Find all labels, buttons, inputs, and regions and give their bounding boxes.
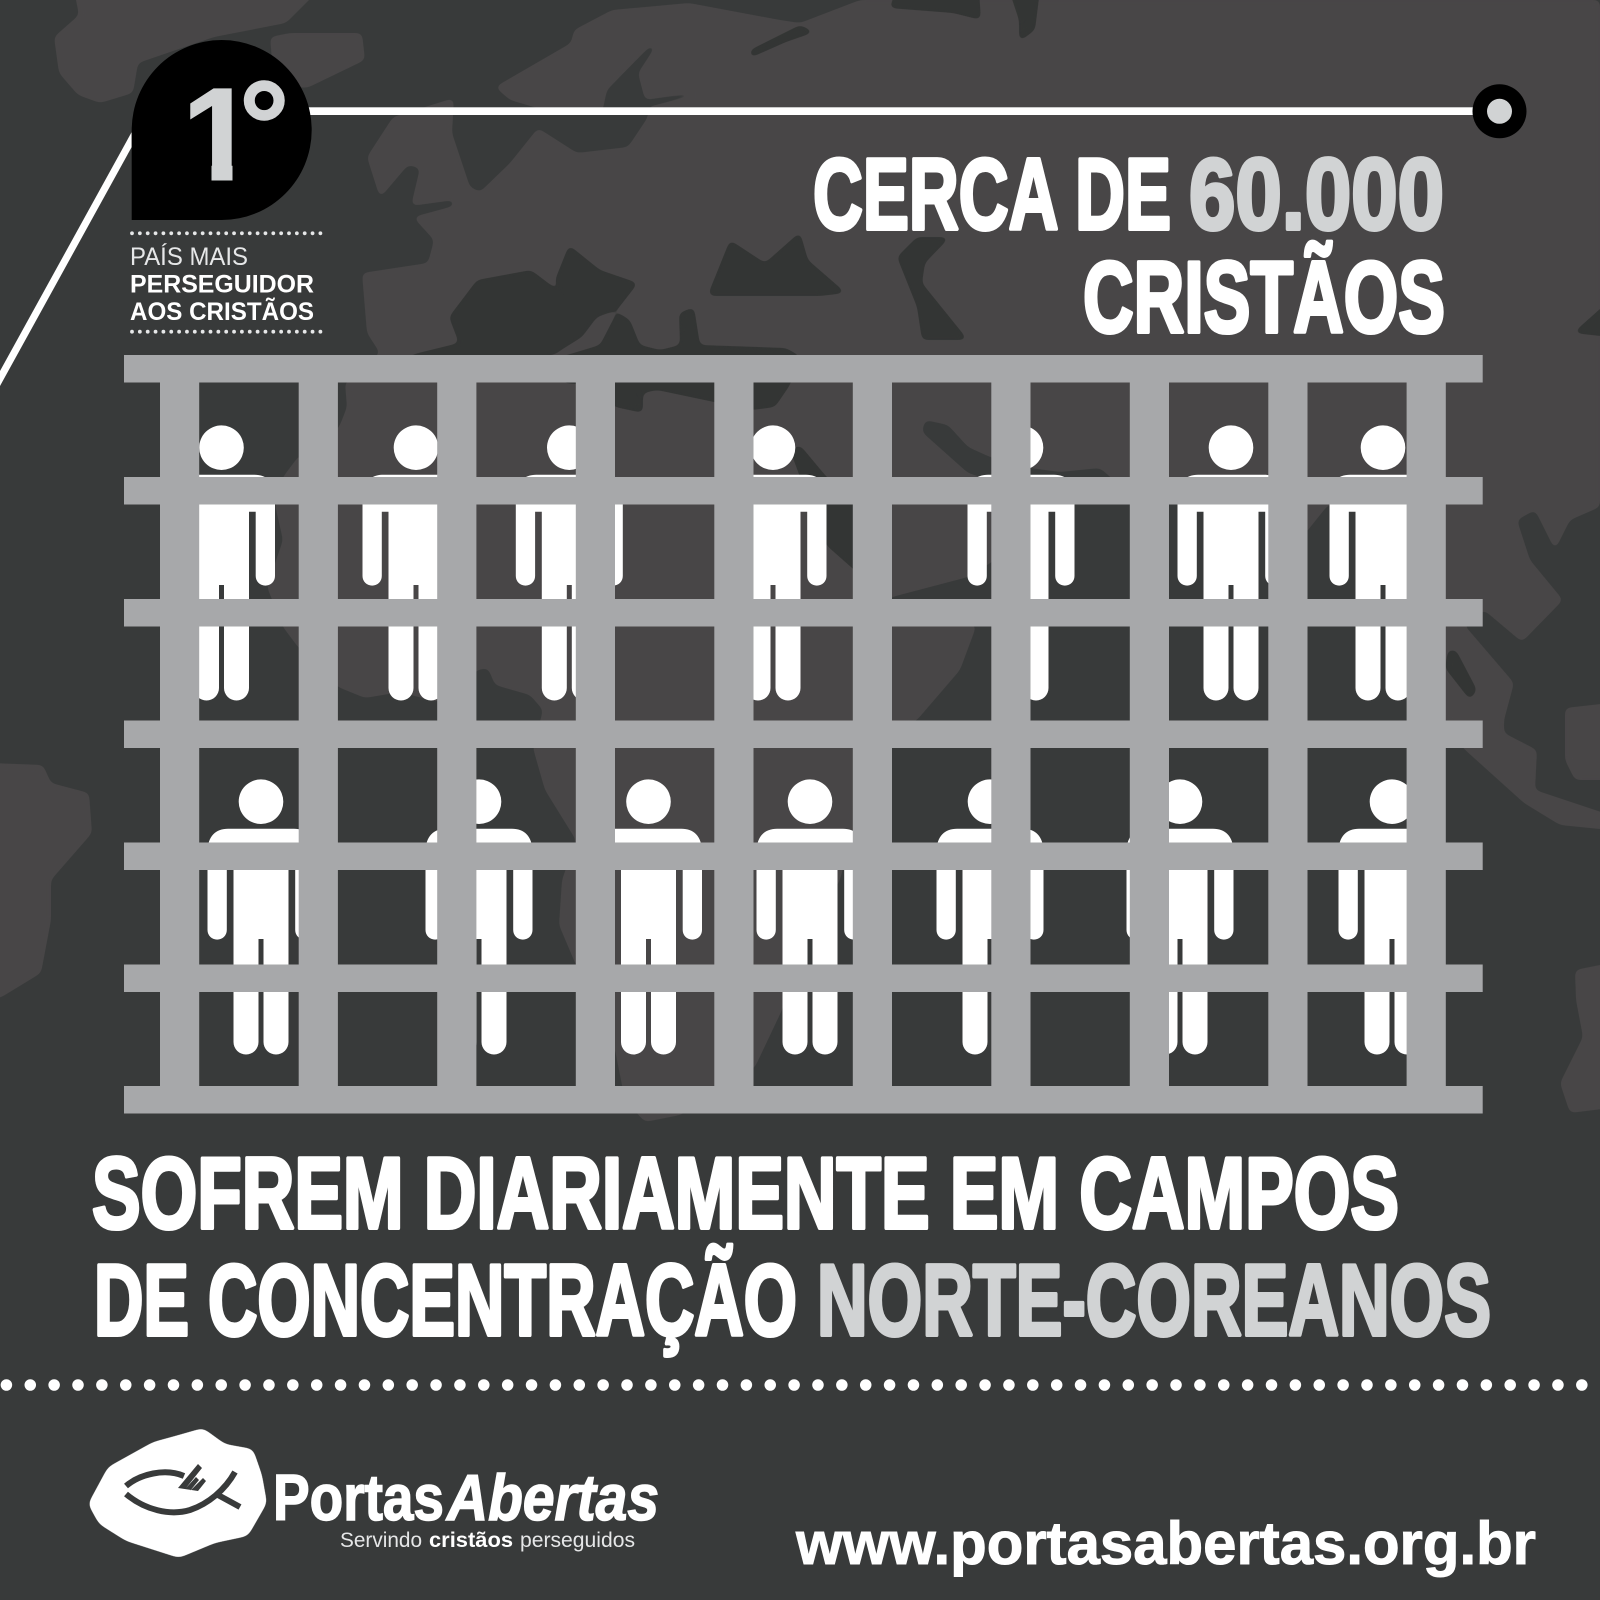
sea: Red Sea bbox=[790, 445, 860, 575]
logo: Portas Abertas: Portas bbox=[273, 1461, 444, 1534]
title: cerca de 60.000 cristãos: CERCA DE bbox=[813, 139, 1171, 251]
logo: Portas Abertas: Servindo bbox=[340, 1529, 422, 1552]
title: cerca de 60.000 cristãos: 60.000 bbox=[1189, 139, 1444, 251]
map: South-East Asia bbox=[1445, 620, 1600, 830]
prison bars bbox=[124, 355, 1483, 1114]
map: Japan bbox=[1565, 703, 1600, 780]
map: Australia bbox=[1560, 963, 1600, 1113]
people: bottom row bbox=[208, 779, 1446, 1054]
logo: Portas Abertas: cristãos bbox=[429, 1529, 513, 1552]
diagonal line bbox=[0, 132, 132, 386]
ranking caption: PAÍS MAIS bbox=[130, 242, 248, 271]
title: cerca de 60.000 cristãos bbox=[813, 139, 1445, 354]
map: light landmasses bbox=[0, 0, 1600, 1122]
people: top row bbox=[168, 425, 1436, 700]
sea: far east strip bbox=[1573, 300, 1600, 337]
sea: Caspian bbox=[897, 237, 968, 340]
map: South America bbox=[0, 763, 92, 998]
map: Iceland bbox=[270, 33, 365, 88]
sea: north bbox=[750, 25, 815, 58]
badge: 1st place bbox=[132, 40, 312, 220]
badge: 1st place: ° bbox=[239, 55, 289, 196]
website url: www.portasabertas.org.br bbox=[795, 1510, 1536, 1577]
dotted divider bbox=[6, 1379, 1600, 1391]
logo: rock with fish bbox=[88, 1428, 267, 1558]
sea: arctic 2 bbox=[1009, 0, 1040, 42]
sea: Mediterranean bbox=[557, 307, 800, 413]
badge: 1st place: 1 bbox=[182, 61, 255, 208]
horizontal pointer line bbox=[300, 107, 1490, 115]
headline: sofrem diariamente: DE CONCENTRAÇÃO bbox=[94, 1245, 797, 1357]
map: dark seas bbox=[398, 0, 1600, 700]
sea: Bay of Bengal stripe bbox=[1445, 650, 1477, 700]
ranking caption bbox=[130, 233, 321, 332]
sea: Atlantic coast bbox=[398, 245, 638, 365]
headline: sofrem diariamente bbox=[92, 1138, 1491, 1357]
sea: arctic 1 bbox=[889, 0, 981, 20]
sea: Black Sea bbox=[709, 232, 846, 296]
logo: Portas Abertas bbox=[88, 1428, 659, 1558]
end dot bbox=[1472, 84, 1526, 138]
map: Eurasia and Africa bbox=[267, 0, 1600, 1122]
title: cerca de 60.000 cristãos: CRISTÃOS bbox=[1083, 242, 1445, 354]
logo: Portas Abertas: Abertas bbox=[445, 1461, 659, 1534]
background: world map bbox=[0, 0, 1600, 1122]
people behind bars bbox=[168, 425, 1446, 1054]
logo: Portas Abertas: perseguidos bbox=[520, 1529, 635, 1552]
ranking caption: PERSEGUIDOR bbox=[130, 271, 314, 299]
ranking caption: AOS CRISTÃOS bbox=[130, 296, 314, 326]
map: Greenland bbox=[54, 0, 319, 103]
